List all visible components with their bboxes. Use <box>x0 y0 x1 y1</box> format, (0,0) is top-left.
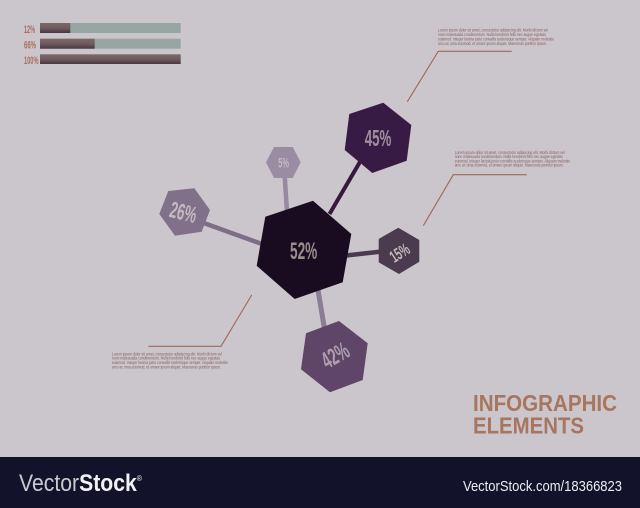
callout: top right: nunc malesuada condimentum. Nulla hendrerit felis nec augue egestas <box>438 32 546 37</box>
node: 42% <box>301 321 368 392</box>
title <box>473 390 617 438</box>
connector: 26% <box>201 222 262 244</box>
connector: 5% <box>285 176 287 212</box>
callout: top right <box>407 28 554 102</box>
callout: lower left <box>112 295 252 370</box>
logo: VectorStock: VectorStock <box>19 470 144 497</box>
title: INFOGRAPHIC <box>473 390 617 416</box>
callout: top right: Lorem ipsum dolor sit amet, consectetur adipiscing elit. Morbi dictum vel <box>438 28 548 32</box>
node: 45%: 45% <box>365 125 391 151</box>
callout: middle right: arcu ac urna euismod, et ornare ipsum aliquet. Maecenas porttitor ipsum. <box>455 163 564 168</box>
callout: top right: arcu ac urna euismod, et ornare ipsum aliquet. Maecenas porttitor ipsum. <box>438 41 547 46</box>
callout: top right: euismod. Integer lacinia justo convallis scelerisque semper. Aliquam molestie <box>438 36 554 41</box>
bar: 66%: 66% <box>24 40 36 52</box>
node: 42%: 42% <box>317 337 354 375</box>
callout: middle right <box>423 150 571 226</box>
callout: middle right: Lorem ipsum dolor sit amet, consectetur adipiscing elit. Morbi dictum vel <box>455 150 565 155</box>
node: 5%: 5% <box>278 154 289 170</box>
connector: 42% <box>318 290 324 329</box>
node: 15%: 15% <box>386 240 413 267</box>
node: 15% <box>379 228 419 274</box>
callout: lower left: arcu ac urna euismod, et ornare ipsum aliquet. Maecenas porttitor ipsum. <box>112 364 221 370</box>
bar: 12% <box>24 23 181 36</box>
connector: 45% <box>330 161 360 214</box>
node: 26% <box>159 188 210 236</box>
callout: lower left: euismod. Integer lacinia justo convallis scelerisque semper. Aliquam molestie <box>112 360 228 365</box>
footer band <box>0 457 640 508</box>
bar: 100%: 100% <box>24 55 39 67</box>
progress bars <box>24 23 181 67</box>
node: 45% <box>345 103 411 173</box>
node: 52% <box>257 201 351 299</box>
node: 26%: 26% <box>167 196 200 228</box>
bar: 66% <box>24 39 181 52</box>
callout: lower left: Lorem ipsum dolor sit amet, consectetur adipiscing elit. Morbi dictum vel <box>112 351 222 356</box>
callout: lower left: nunc malesuada condimentum. Nulla hendrerit felis nec augue egestas <box>112 356 220 361</box>
title: ELEMENTS <box>473 412 584 438</box>
connector: 15% <box>346 252 382 256</box>
bar: 12%: 12% <box>24 24 35 36</box>
node: 52%: 52% <box>290 238 317 265</box>
callout: middle right: euismod. Integer lacinia justo convallis scelerisque semper. Aliquam molestie <box>455 158 571 163</box>
bar: 100% <box>24 54 181 67</box>
callout: middle right: nunc malesuada condimentum. Nulla hendrerit felis nec augue egestas <box>455 154 563 159</box>
hexagon network chart <box>159 103 419 392</box>
logo: VectorStock: ® <box>137 474 142 483</box>
node: 5% <box>266 147 301 178</box>
